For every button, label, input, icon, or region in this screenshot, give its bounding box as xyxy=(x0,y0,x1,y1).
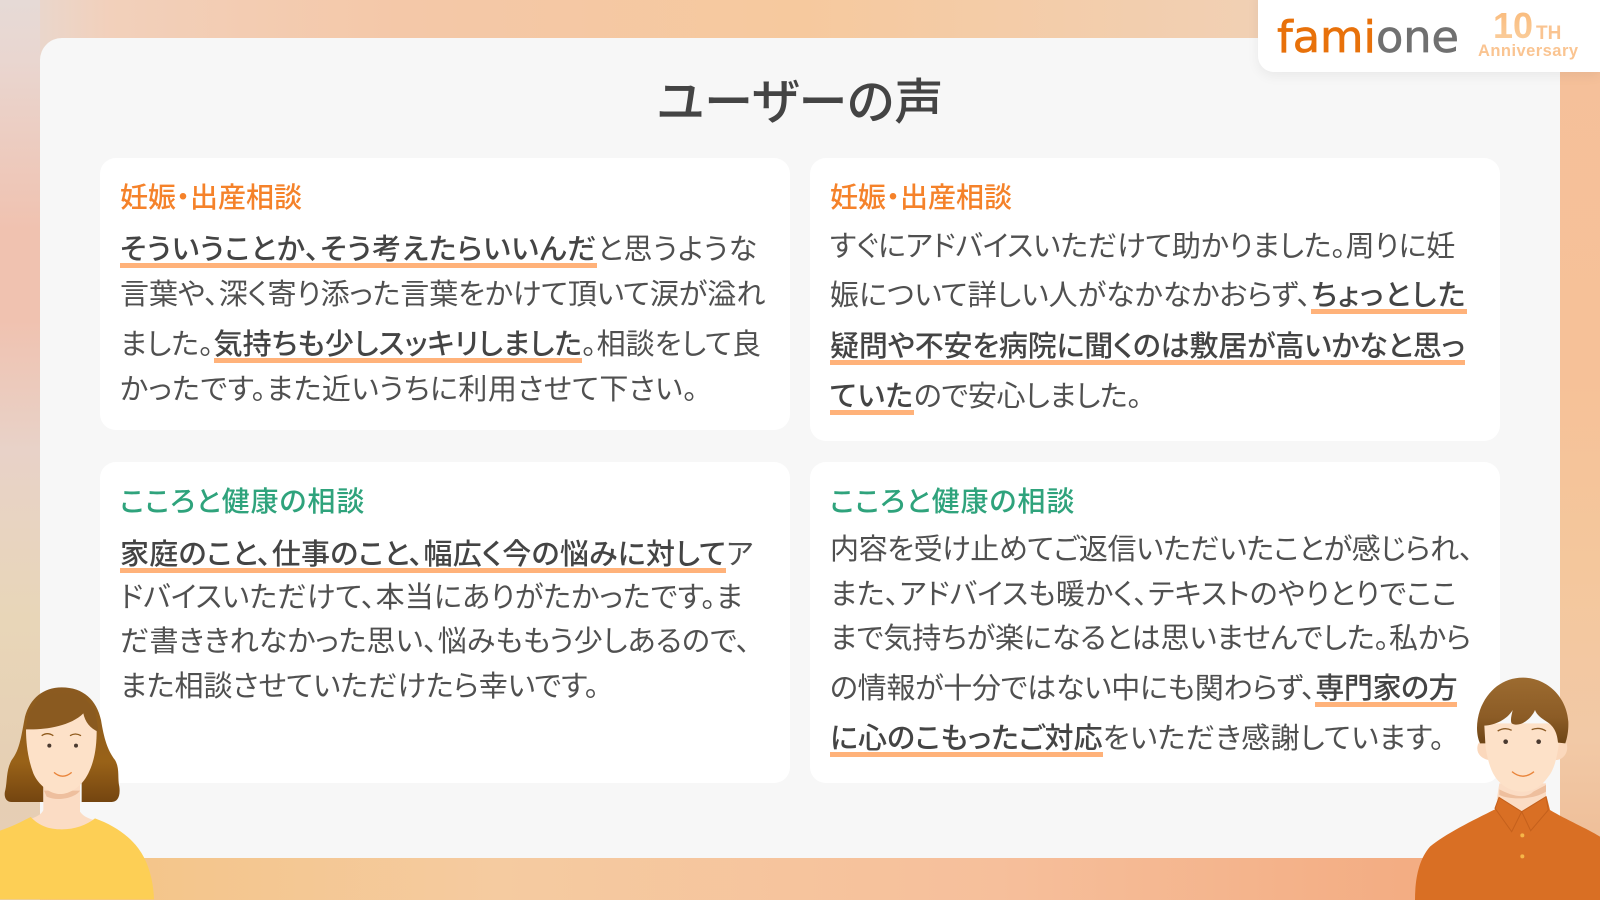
man face xyxy=(1484,723,1560,792)
testimonial line 3: ました。気持ちも少しスッキリしました。相談をして良 xyxy=(120,329,761,361)
panel: mind and health consultation voice 1 xyxy=(100,462,790,783)
woman eyes xyxy=(47,744,78,748)
man eyebrows xyxy=(1498,728,1546,731)
woman neck xyxy=(27,783,97,837)
10 text: 10 xyxy=(1493,5,1533,46)
man shirt xyxy=(1415,797,1600,900)
testimonial line 5: に心のこもったご対応をいただき感謝しています。 xyxy=(830,723,1445,755)
TH text: TH xyxy=(1536,23,1561,44)
testimonial line 4: の情報が十分ではない中にも関わらず、専門家の方 xyxy=(830,673,1457,705)
testimonial line 1: 家庭のこと、仕事のこと、幅広く今の悩みに対してア xyxy=(120,539,753,571)
testimonial line 1: すぐにアドバイスいただけて助かりました。周りに妊 xyxy=(830,231,1455,263)
woman fringe xyxy=(26,693,99,732)
man eyes xyxy=(1503,739,1541,744)
man collar xyxy=(1495,797,1548,832)
woman eyebrows xyxy=(42,734,81,736)
man ears xyxy=(1477,740,1567,760)
category heading: こころと健康の相談 xyxy=(120,486,365,517)
testimonial line 2: また、アドバイスも暖かく、テキストのやりとりでここ xyxy=(830,579,1457,611)
woman neck shadow xyxy=(44,791,80,799)
panel: mind and health consultation voice 2 xyxy=(810,462,1500,783)
woman smile xyxy=(54,772,72,776)
testimonial line 4: かったです。また近いうちに利用させて下さい。 xyxy=(120,374,698,406)
category heading: 妊娠・出産相談 xyxy=(120,182,302,213)
testimonial line 3: だ書ききれなかった思い、悩みももう少しあるので、 xyxy=(120,626,750,658)
man smile xyxy=(1512,772,1534,776)
testimonial line 1: 内容を受け止めてご返信いただいたことが感じられ、 xyxy=(830,534,1473,566)
category heading: 妊娠・出産相談 xyxy=(830,182,1012,213)
testimonial line 2: 娠について詳しい人がなかなかおらず、ちょっとした xyxy=(830,280,1467,312)
famione wordmark: famione xyxy=(1277,12,1459,63)
anniversary text: Anniversary xyxy=(1478,42,1579,60)
logo box xyxy=(1258,0,1600,72)
bottom edge xyxy=(0,900,1600,901)
testimonial line 2: 言葉や、深く寄り添った言葉をかけて頂いて涙が溢れ xyxy=(120,279,765,311)
woman sweater xyxy=(0,817,154,899)
category heading: こころと健康の相談 xyxy=(830,486,1075,517)
title: ユーザーの声 xyxy=(657,76,943,130)
testimonial line 4: また相談させていただけたら幸いです。 xyxy=(120,671,599,703)
testimonial line 4: ていたので安心しました。 xyxy=(830,381,1141,413)
testimonial line 2: ドバイスいただけて、本当にありがたかったです。ま xyxy=(120,582,743,614)
woman face xyxy=(26,709,97,794)
panel: pregnancy consultation voice 2 xyxy=(810,158,1500,441)
man neck xyxy=(1497,783,1546,817)
man neck shadow xyxy=(1499,785,1546,798)
man buttons xyxy=(1520,833,1524,858)
man hair xyxy=(1477,678,1568,743)
woman hair back xyxy=(5,687,120,802)
panel: pregnancy consultation voice 1 xyxy=(100,158,790,430)
illustration: man xyxy=(1415,678,1600,900)
illustration: woman xyxy=(0,687,154,900)
testimonial line 3: 疑問や不安を病院に聞くのは敷居が高いかなと思っ xyxy=(830,331,1465,363)
famione logo and 10th anniversary mark xyxy=(1277,5,1579,63)
testimonial line 3: まで気持ちが楽になるとは思いませんでした。私から xyxy=(830,623,1471,655)
testimonial line 1: そういうことか、そう考えたらいいんだと思うような xyxy=(120,234,758,266)
